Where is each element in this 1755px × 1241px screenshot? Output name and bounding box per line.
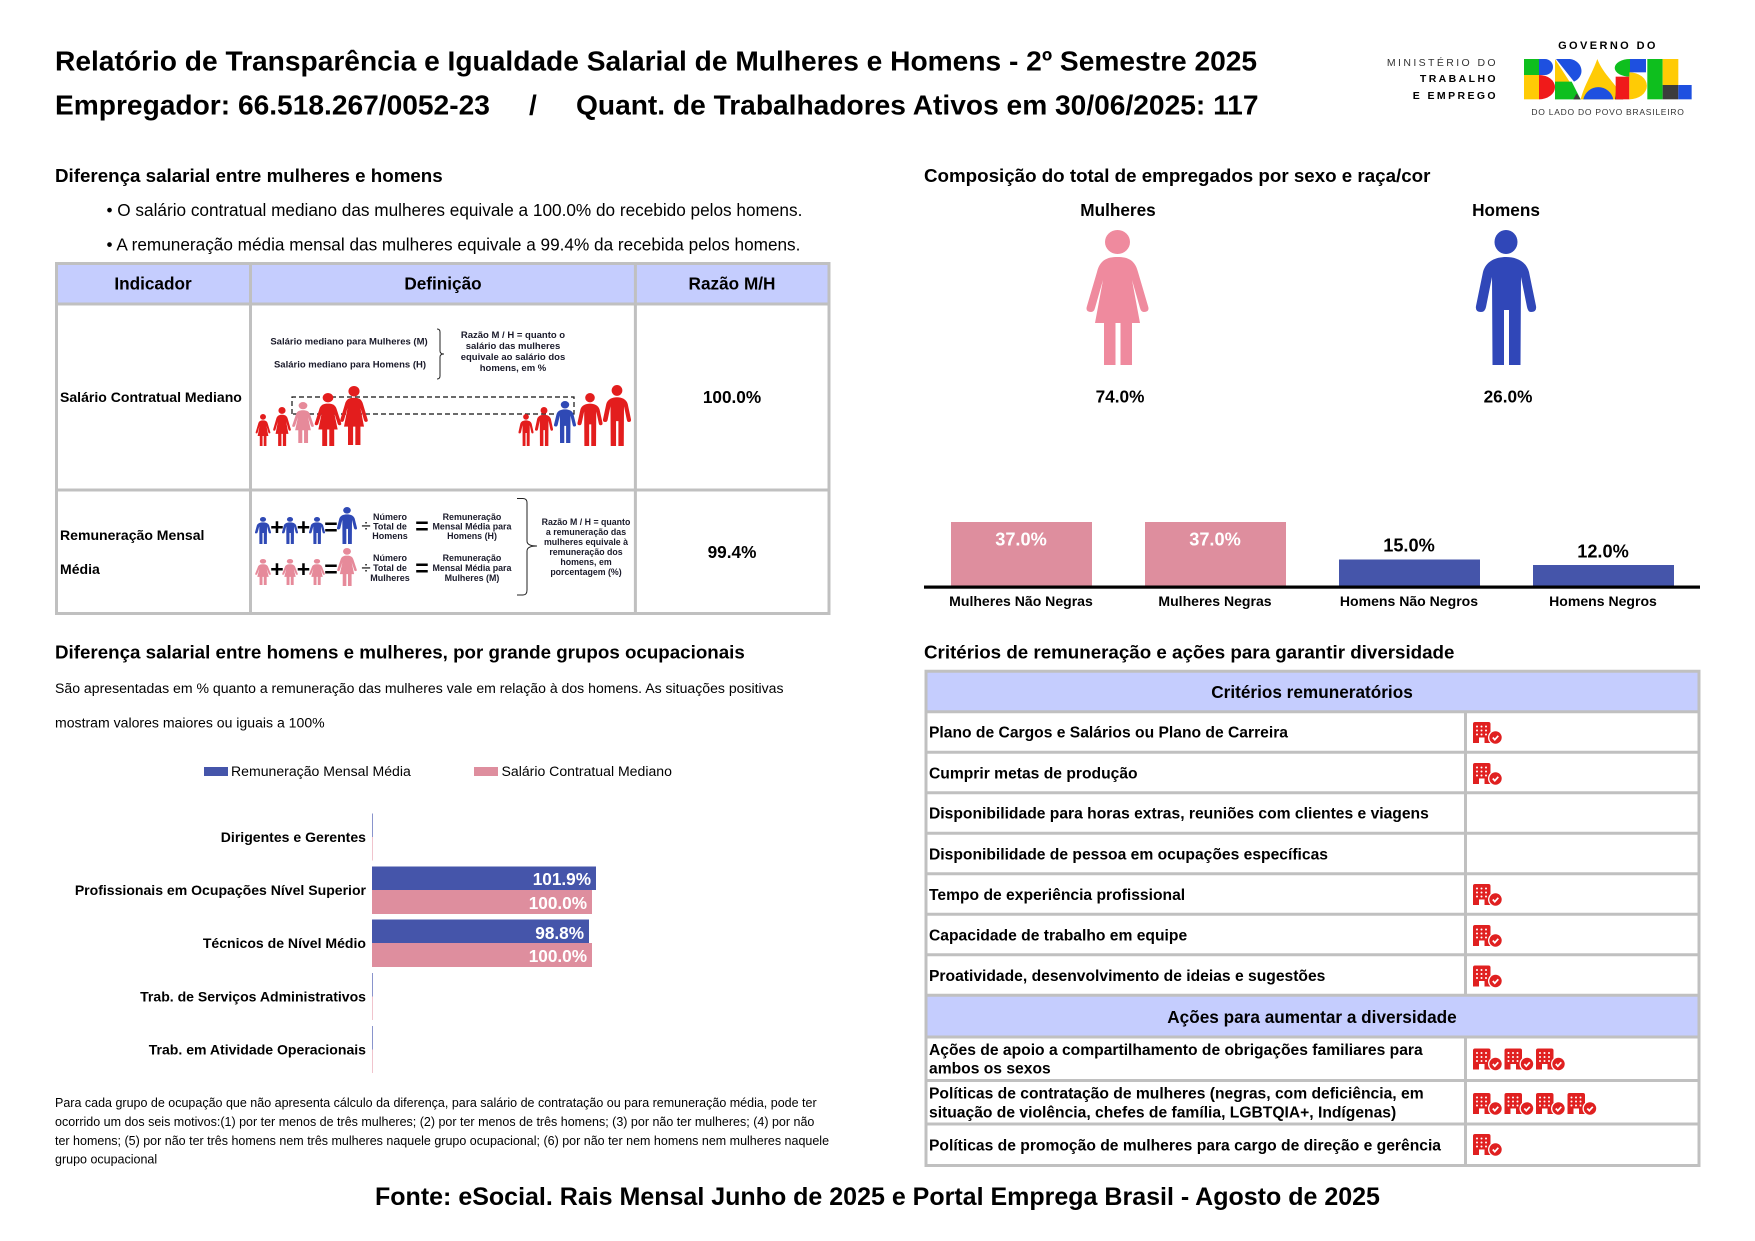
bar chart: sexo e raça/cor: 37.0% <box>1189 530 1241 550</box>
fonte: Fonte: eSocial. Rais Mensal Junho de 2025 e Portal Emprega Brasil - Agosto de 2025 <box>375 1183 1380 1211</box>
panel: homens: Homens <box>1472 200 1540 220</box>
panel: tabela indicadores: 99.4% <box>708 542 756 562</box>
text block: bullets <box>106 200 802 254</box>
panel: tabela critérios e ações: Políticas de contratação de mulheres (negras, com deficiência, em <box>929 1086 1424 1102</box>
heading: critérios: Critérios de remuneração e ações para garantir diversidade <box>924 642 1454 662</box>
bar chart: grupos ocupacionais: Trab. de Serviços Administrativos <box>140 988 366 1004</box>
icon: definição remuneração média: + <box>297 514 310 540</box>
icon: definição salário mediano: Salário mediano para Homens (H) <box>274 360 426 370</box>
bar chart: sexo e raça/cor: 15.0% <box>1383 536 1435 556</box>
title: Empregador: 66.518.267/0052-23 <box>55 90 490 120</box>
icon: definição remuneração média: a remuneração das <box>546 527 626 537</box>
icon: definição remuneração média: Total de <box>373 522 407 532</box>
bar chart: sexo e raça/cor: 37.0% <box>995 530 1047 550</box>
bar chart: grupos ocupacionais <box>75 814 596 1073</box>
panel: tabela critérios e ações: Critérios remuneratórios <box>1211 682 1413 702</box>
logo: ministério e governo do Brasil <box>1387 40 1692 117</box>
bar chart: grupos ocupacionais: Dirigentes e Gerentes <box>221 829 366 845</box>
heading: composição: Composição do total de empregados por sexo e raça/cor <box>924 165 1431 186</box>
bar chart: grupos ocupacionais: 100.0% <box>529 946 587 966</box>
icon: definição salário mediano: Razão M / H = quanto o <box>461 330 565 341</box>
panel: tabela indicadores: Definição <box>404 274 482 294</box>
heading: grupos ocupacionais: Diferença salarial entre homens e mulheres, por grande grupos ocupacionais <box>55 642 745 662</box>
icon: definição remuneração média: ÷ <box>361 558 371 578</box>
text block: explicação: São apresentadas em % quanto a remuneração das mulheres vale em relação à dos homens. As situações positivas <box>55 680 784 696</box>
logo: ministério e governo do Brasil: E EMPREGO <box>1413 90 1498 102</box>
panel: tabela critérios e ações: situação de violência, chefes de família, LGBTQIA+, Indígenas) <box>929 1104 1396 1122</box>
icon: definição remuneração média: Mensal Média para <box>433 563 512 573</box>
icon: definição remuneração média: = <box>324 556 338 582</box>
panel: tabela indicadores <box>56 264 829 614</box>
icon: definição salário mediano <box>256 329 631 446</box>
bar chart: sexo e raça/cor: 12.0% <box>1577 542 1629 562</box>
panel: tabela indicadores: Média <box>60 561 100 577</box>
panel: tabela indicadores: Remuneração Mensal <box>60 527 204 543</box>
icon: definição salário mediano: Salário mediano para Mulheres (M) <box>270 336 428 348</box>
panel: tabela critérios e ações: Disponibilidade para horas extras, reuniões com clientes e viagens <box>929 806 1429 822</box>
panel: mulheres: Mulheres <box>1080 200 1156 220</box>
text block: explicação <box>55 680 784 730</box>
logo: ministério e governo do Brasil: GOVERNO DO <box>1558 40 1658 52</box>
legend <box>204 763 672 779</box>
panel: tabela critérios e ações <box>926 671 1699 1166</box>
icon: definição remuneração média: + <box>270 514 284 540</box>
panel: homens: 26.0% <box>1484 386 1532 406</box>
bar chart: grupos ocupacionais: Profissionais em Ocupações Nível Superior <box>75 882 367 898</box>
text block: nota de rodapé <box>55 1096 829 1166</box>
icon: definição remuneração média: Remuneração <box>443 553 502 563</box>
icon: definição remuneração média: + <box>270 556 284 582</box>
icon: definição remuneração média: homens, em <box>560 557 612 567</box>
bar chart: grupos ocupacionais: 101.9% <box>533 869 591 889</box>
icon: definição salário mediano: salário das mulheres <box>466 341 560 352</box>
icon: definição remuneração média: = <box>324 514 338 540</box>
icon: definição remuneração média: ÷ <box>361 516 371 536</box>
icon: definição remuneração média <box>255 498 631 595</box>
bar chart: grupos ocupacionais: Técnicos de Nível Médio <box>203 935 366 951</box>
icons: empresas com critério <box>1473 722 1598 1157</box>
text block: nota de rodapé: ter homens; (5) por não ter três homens nem três mulheres naquele grupo ocupacional; (6) por não ter nem homens nem mulheres naquele <box>55 1134 829 1148</box>
heading: diferença salarial: Diferença salarial entre mulheres e homens <box>55 165 443 186</box>
panel: tabela indicadores: Indicador <box>114 274 192 294</box>
text block: explicação: mostram valores maiores ou iguais a 100% <box>55 714 325 730</box>
title: / <box>529 90 537 120</box>
bar chart: sexo e raça/cor: Homens Não Negros <box>1340 593 1478 609</box>
panel: tabela critérios e ações: Capacidade de trabalho em equipe <box>929 928 1187 944</box>
text block: nota de rodapé: grupo ocupacional <box>55 1152 157 1166</box>
panel: tabela critérios e ações: Tempo de experiência profissional <box>929 887 1185 904</box>
logo: ministério e governo do Brasil: MINISTÉRIO DO <box>1387 56 1498 69</box>
icon: definição remuneração média: Homens (H) <box>447 531 497 541</box>
panel: tabela critérios e ações: Disponibilidade de pessoa em ocupações específicas <box>929 846 1328 864</box>
bar chart: sexo e raça/cor: Mulheres Negras <box>1158 593 1272 609</box>
title: Relatório de Transparência e Igualdade Salarial de Mulheres e Homens - 2º Semestre 2025 <box>55 46 1257 76</box>
icon: definição remuneração média: = <box>415 513 429 539</box>
panel: mulheres <box>1080 200 1156 406</box>
panel: tabela critérios e ações: Políticas de promoção de mulheres para cargo de direção e gerência <box>929 1138 1441 1154</box>
bar chart: sexo e raça/cor <box>924 522 1700 609</box>
icon: definição remuneração média: remuneração dos <box>549 547 623 557</box>
text block: nota de rodapé: Para cada grupo de ocupação que não apresenta cálculo da diferença, para salário de contratação ou para remuneração média, pode ter <box>55 1096 817 1110</box>
bar chart: grupos ocupacionais: 100.0% <box>529 893 587 913</box>
panel: tabela indicadores: 100.0% <box>703 387 761 407</box>
text block: bullets: • A remuneração média mensal das mulheres equivale a 99.4% da recebida pelos homens. <box>106 234 800 254</box>
logo: ministério e governo do Brasil: DO LADO DO POVO BRASILEIRO <box>1531 107 1685 117</box>
icon: definição remuneração média: Mulheres (M) <box>445 573 499 583</box>
icon: definição remuneração média: = <box>415 555 429 581</box>
title: Quant. de Trabalhadores Ativos em 30/06/2025: 117 <box>576 90 1258 120</box>
icon: definição remuneração média: Razão M / H = quanto <box>542 517 631 527</box>
panel: homens <box>1472 200 1540 406</box>
icon: definição remuneração média: Mulheres <box>370 573 410 583</box>
icon: definição remuneração média: Remuneração <box>443 512 502 522</box>
icon: definição remuneração média: mulheres equivale à <box>544 537 628 547</box>
legend: Remuneração Mensal Média <box>231 763 411 779</box>
panel: tabela indicadores: Salário Contratual Mediano <box>60 389 242 405</box>
panel: tabela critérios e ações: Cumprir metas de produção <box>929 766 1138 782</box>
icon: definição remuneração média: Mensal Média para <box>433 522 512 532</box>
panel: tabela critérios e ações: Ações de apoio a compartilhamento de obrigações familiares para <box>929 1042 1423 1059</box>
icon: definição salário mediano: homens, em % <box>480 363 547 374</box>
icon: definição remuneração média: porcentagem (%) <box>550 567 622 577</box>
text block: nota de rodapé: ocorrido um dos seis motivos:(1) por ter menos de três mulheres; (2) por ter menos de três homens; (3) por não ter mulheres; (4) por não <box>55 1115 814 1129</box>
panel: tabela indicadores: Razão M/H <box>689 274 775 294</box>
bar chart: grupos ocupacionais: Trab. em Atividade Operacionais <box>149 1042 366 1058</box>
icon: definição remuneração média: Número <box>373 553 407 563</box>
panel: tabela critérios e ações: Proatividade, desenvolvimento de ideias e sugestões <box>929 968 1326 985</box>
icon: definição remuneração média: Total de <box>373 563 407 573</box>
panel: mulheres: 74.0% <box>1096 386 1144 406</box>
bar chart: sexo e raça/cor: Mulheres Não Negras <box>949 593 1093 609</box>
icon: definição remuneração média: + <box>297 556 310 582</box>
icon: definição salário mediano: equivale ao salário dos <box>461 352 565 363</box>
title <box>55 46 1258 120</box>
icon: definição remuneração média: Número <box>373 512 407 522</box>
bar chart: grupos ocupacionais: 98.8% <box>535 923 584 943</box>
panel: tabela critérios e ações: ambos os sexos <box>929 1060 1051 1078</box>
icon: definição remuneração média: Homens <box>372 531 408 541</box>
panel: tabela critérios e ações: Plano de Cargos e Salários ou Plano de Carreira <box>929 724 1288 742</box>
text block: bullets: • O salário contratual mediano das mulheres equivale a 100.0% do recebido pelos homens. <box>106 200 802 220</box>
logo: ministério e governo do Brasil: TRABALHO <box>1420 73 1498 85</box>
legend: Salário Contratual Mediano <box>502 763 672 779</box>
bar chart: sexo e raça/cor: Homens Negros <box>1549 593 1657 609</box>
panel: tabela critérios e ações: Ações para aumentar a diversidade <box>1167 1007 1457 1027</box>
